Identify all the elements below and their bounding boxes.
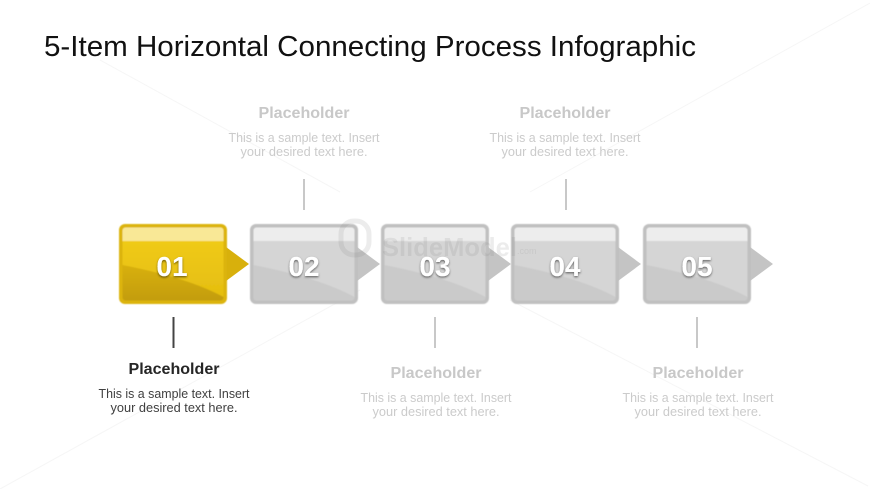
arrow 01 <box>226 247 249 281</box>
text block 03 <box>360 365 512 419</box>
connector 05 <box>696 317 698 348</box>
text block 05: your desired text here. <box>634 405 762 419</box>
step 04 <box>511 224 641 304</box>
text block 04: This is a sample text. Insert <box>490 131 641 145</box>
number 02: 02 <box>288 251 320 282</box>
text block 02: Placeholder <box>258 105 350 122</box>
text block 02 <box>228 105 380 159</box>
text block 03: Placeholder <box>390 365 482 382</box>
arrow 04 <box>618 247 641 281</box>
watermark <box>341 221 537 262</box>
box 02 <box>250 224 358 304</box>
text block 04: Placeholder <box>520 105 610 122</box>
connector 04 <box>565 179 567 210</box>
watermark: .com <box>517 246 537 256</box>
number 01: 01 <box>156 251 188 282</box>
arrow 03 <box>488 247 511 281</box>
number 05: 05 <box>681 251 713 282</box>
watermark: SlideModel <box>382 232 517 262</box>
text block 04: your desired text here. <box>502 145 628 159</box>
text block 03: This is a sample text. Insert <box>360 391 512 405</box>
connector 03 <box>434 317 436 348</box>
connector 01 <box>172 317 174 348</box>
text block 03: your desired text here. <box>372 405 500 419</box>
number 04: 04 <box>549 251 581 282</box>
text block 02: your desired text here. <box>240 145 368 159</box>
text block 04 <box>490 105 641 159</box>
box 05 <box>643 224 751 304</box>
text block 05: This is a sample text. Insert <box>622 391 774 405</box>
text block 02: This is a sample text. Insert <box>228 131 380 145</box>
box 04 <box>511 224 619 304</box>
text block 05: Placeholder <box>652 365 744 382</box>
step 03 <box>381 224 511 304</box>
text block 01: your desired text here. <box>110 401 238 415</box>
arrow 05 <box>750 247 773 281</box>
text block 05 <box>622 365 774 419</box>
text block 01: Placeholder <box>128 361 220 378</box>
box 01 <box>119 224 227 304</box>
box 03 <box>381 224 489 304</box>
step 02 <box>250 224 380 304</box>
text block 01 <box>98 361 250 415</box>
text block 01: This is a sample text. Insert <box>98 387 250 401</box>
step 01 <box>119 224 249 304</box>
arrow 02 <box>357 247 380 281</box>
title: 5-Item Horizontal Connecting Process Infographic <box>44 31 696 63</box>
step 05 <box>643 224 773 304</box>
connector 02 <box>303 179 305 210</box>
number 03: 03 <box>419 251 451 282</box>
